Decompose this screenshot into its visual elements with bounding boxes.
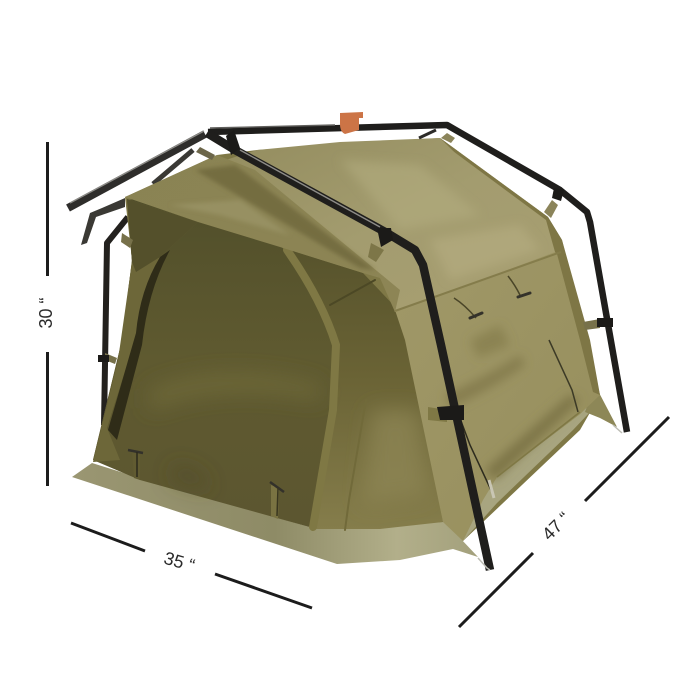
left hanging strap bbox=[81, 198, 125, 245]
left front tube bbox=[68, 134, 205, 208]
roof hem seam bbox=[395, 252, 561, 311]
dimension: width 35 inches bbox=[71, 523, 312, 608]
rear frame arch bbox=[419, 130, 436, 138]
side wall bbox=[395, 250, 600, 541]
side wall toggles bbox=[454, 276, 520, 318]
side wall ground sheet bbox=[443, 396, 612, 541]
roof bbox=[210, 138, 560, 312]
front wall shading bbox=[150, 374, 428, 505]
front right panel bbox=[290, 250, 443, 529]
roof edge binding bbox=[440, 138, 600, 395]
front arch tube bbox=[207, 133, 490, 570]
dimension: length 47 inches bbox=[459, 417, 669, 627]
dimension: width 35 inches: 35 “ bbox=[162, 548, 197, 576]
dimension: length 47 inches: 47 “ bbox=[538, 508, 574, 544]
door flap and shadow bbox=[93, 199, 198, 462]
side wall zip and hem bbox=[455, 340, 580, 498]
leg feet rings bbox=[478, 425, 622, 570]
flap shading bbox=[170, 165, 375, 270]
tent photo bbox=[68, 112, 627, 570]
rear frame leg and inner tube bbox=[104, 150, 193, 425]
front roof flap bbox=[125, 155, 400, 312]
side wall wrinkles bbox=[445, 325, 580, 480]
roof wrinkles bbox=[340, 160, 540, 280]
tube highlights bbox=[70, 125, 380, 227]
side strap on left leg bbox=[121, 233, 133, 248]
ridge and right tube bbox=[208, 125, 627, 432]
orange clip bbox=[340, 112, 363, 134]
door seam strips bbox=[287, 250, 375, 530]
ground sheet bbox=[72, 463, 478, 564]
front wall bbox=[93, 190, 443, 528]
roof straps bbox=[105, 133, 600, 422]
rear corner flap bbox=[585, 385, 617, 427]
frame clamps bbox=[98, 130, 613, 420]
tent silhouette backing bbox=[93, 138, 600, 541]
dimension: height 30 inches: 30 “ bbox=[36, 297, 56, 329]
front wall toggles bbox=[128, 450, 284, 519]
